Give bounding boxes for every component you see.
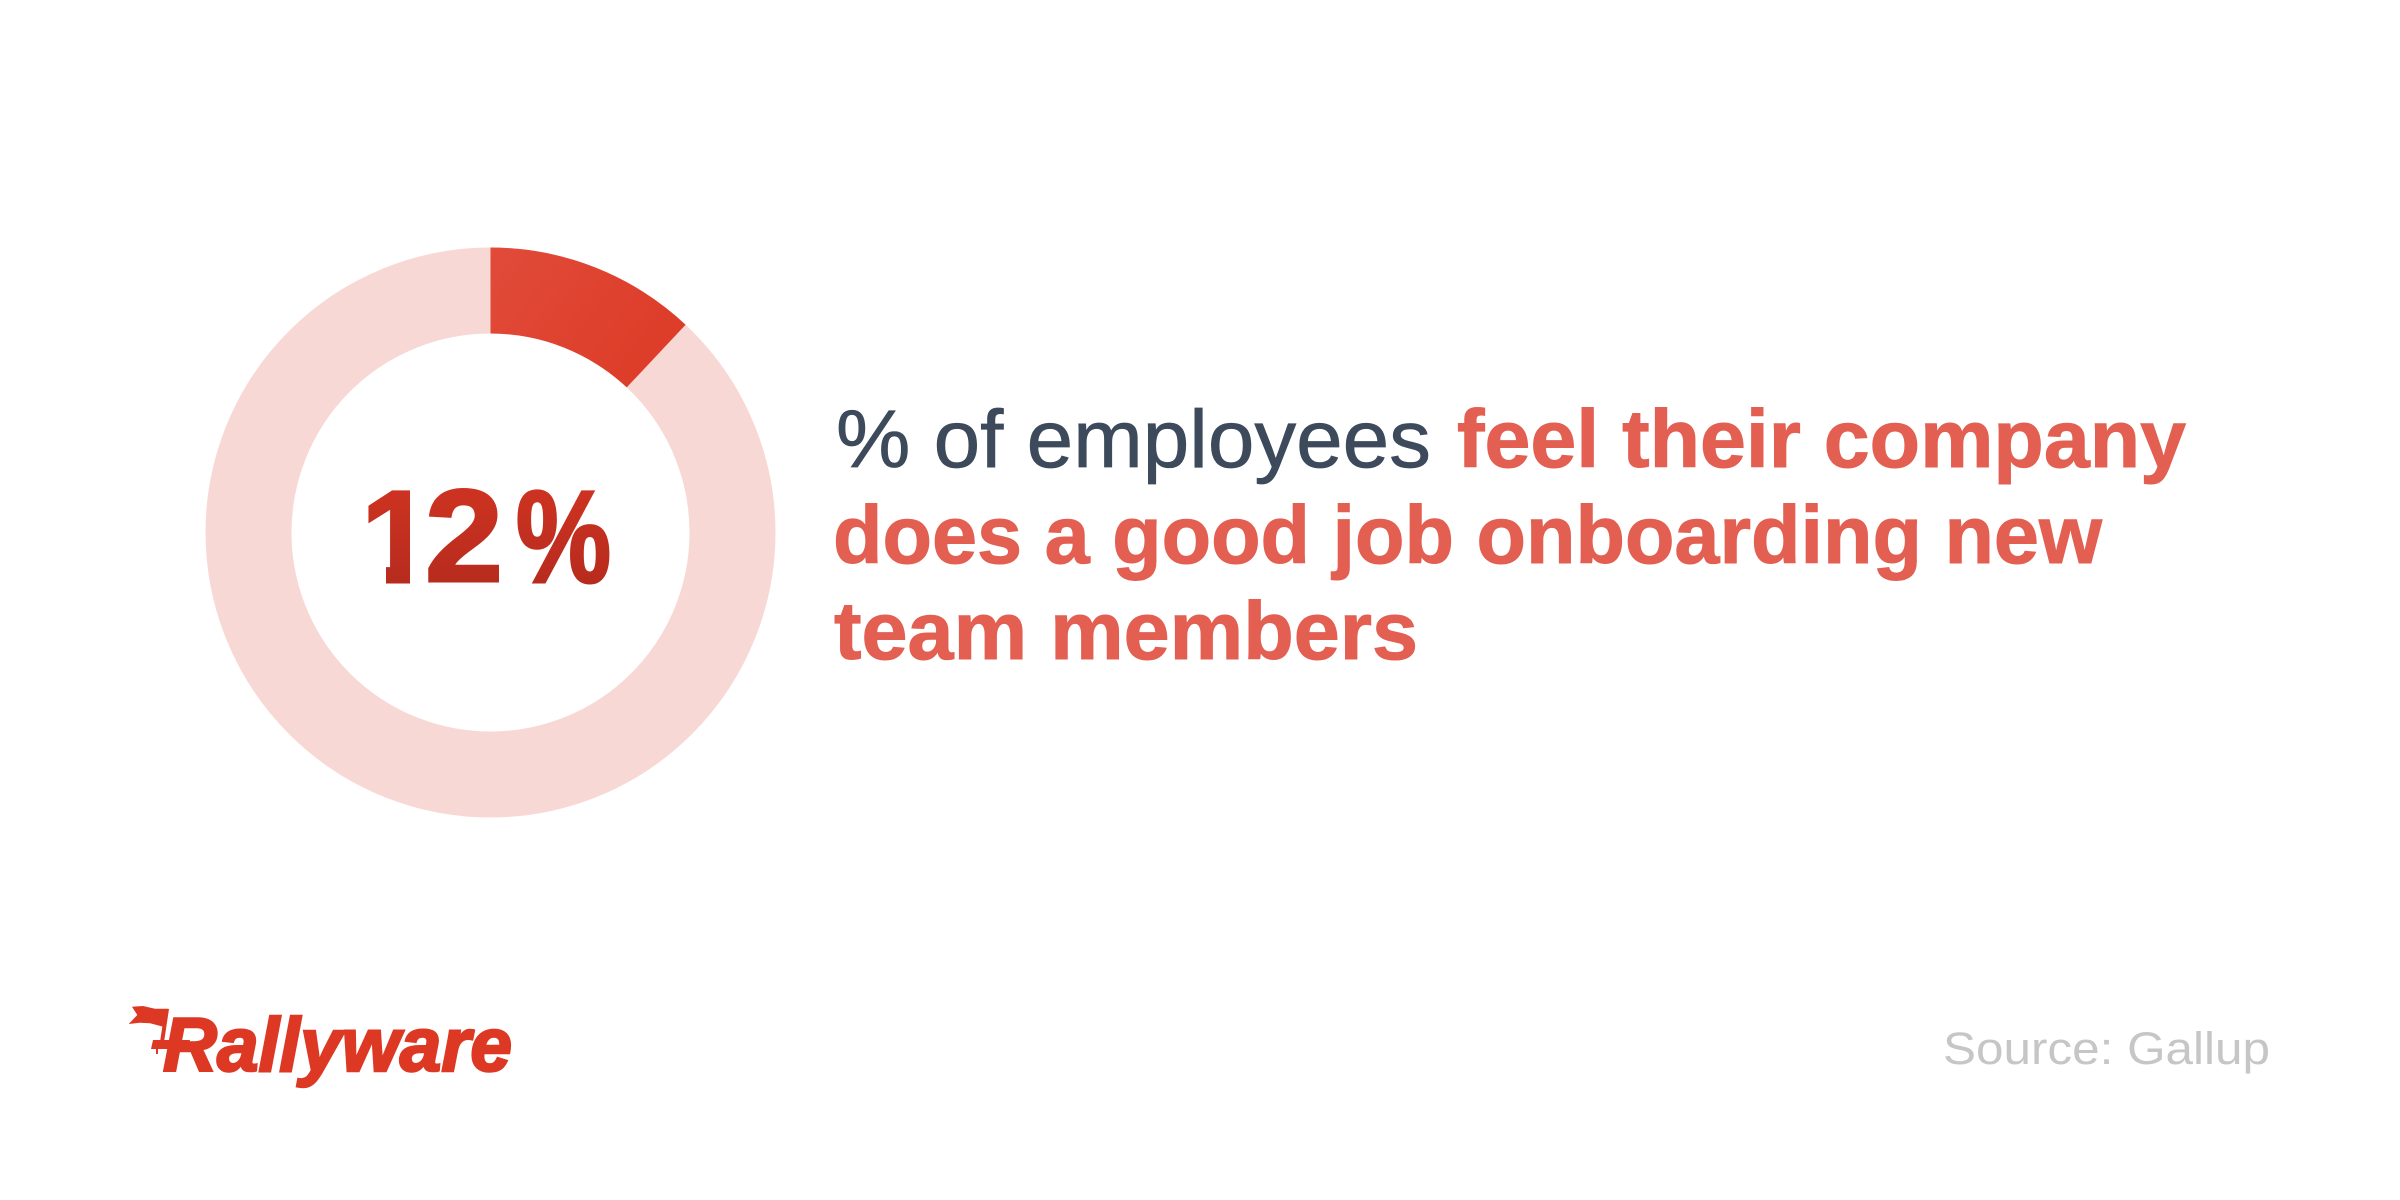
donut value: 2 [425,462,503,609]
infographic canvas [128,248,2268,1088]
donut value: 1 [361,463,434,610]
donut chart: 12% [248,247,732,774]
statement line 3: team members [834,586,1418,677]
Rallyware logo [129,1003,512,1088]
statement text [833,394,2186,677]
donut track [248,290,732,774]
source note: Source: Gallup [1943,1023,2270,1074]
statement line 2: does a good job onboarding new [833,490,2102,581]
donut value [368,488,610,584]
logo wordmark: Rallyware [163,1003,512,1088]
donut value: % [516,463,611,610]
statement line 1: % of employees [836,394,1431,485]
logo flag icon [129,1006,190,1054]
statement line 1: feel their company [1457,394,2186,485]
donut highlighted slice [490,247,686,387]
